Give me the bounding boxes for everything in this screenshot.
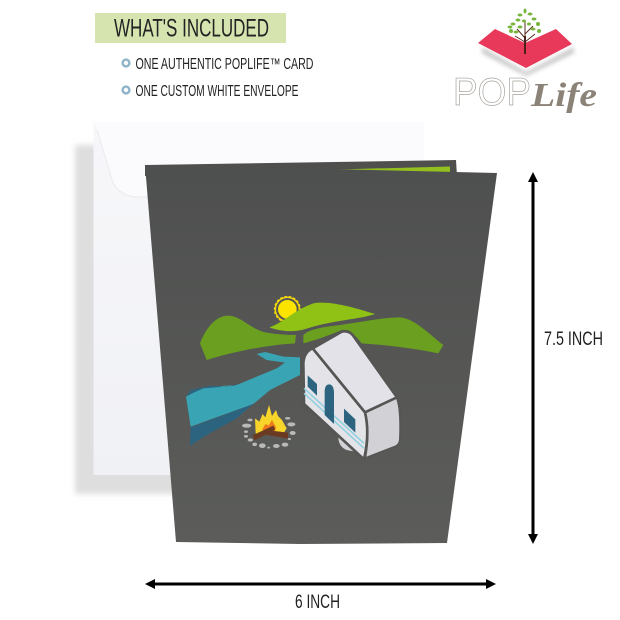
card back panel <box>145 160 457 176</box>
camper back <box>365 397 400 458</box>
hill: right <box>303 317 443 353</box>
illustration: camper scene <box>186 297 443 459</box>
item: envelope: ONE CUSTOM WHITE ENVELOPE <box>136 83 298 100</box>
logo shadow <box>482 47 574 76</box>
card <box>145 160 497 544</box>
envelope shadow <box>75 145 200 494</box>
item: card <box>123 56 313 73</box>
envelope body <box>94 122 424 475</box>
logo wordmark Life: Life <box>530 77 597 114</box>
dimension arrow: width <box>145 579 496 589</box>
heading: what's included: WHAT'S INCLUDED <box>114 14 269 42</box>
logs <box>252 426 275 440</box>
river <box>186 352 300 446</box>
logo tree <box>508 8 541 54</box>
wheel <box>338 437 355 452</box>
stone ring <box>242 417 296 449</box>
dimension label: 7.5 inch: 7.5 INCH <box>544 329 603 350</box>
flames <box>255 405 287 435</box>
stripes <box>304 388 364 448</box>
envelope flap <box>94 122 424 197</box>
camper <box>303 331 400 459</box>
item: envelope <box>123 83 298 100</box>
campfire <box>242 405 296 449</box>
logo red book <box>478 29 572 68</box>
dimension arrow: height <box>528 172 538 544</box>
camper door <box>325 384 334 424</box>
hill: left <box>200 316 296 360</box>
heading: what's included <box>95 13 286 43</box>
card front panel <box>145 165 497 544</box>
camper window right <box>344 409 355 433</box>
dimension label: 6 inch: 6 INCH <box>295 592 340 613</box>
hill: light green <box>269 303 375 331</box>
envelope <box>75 122 424 494</box>
logo wordmark POP: POP <box>453 71 531 114</box>
list: included items <box>123 56 313 100</box>
sun <box>275 297 300 322</box>
logo: PopLife <box>453 8 597 114</box>
camper window left <box>308 375 317 396</box>
card inside green strip <box>318 166 450 173</box>
camper roof <box>313 331 397 412</box>
camper side <box>303 348 367 459</box>
item: card: ONE AUTHENTIC POPLIFE™ CARD <box>136 56 314 73</box>
